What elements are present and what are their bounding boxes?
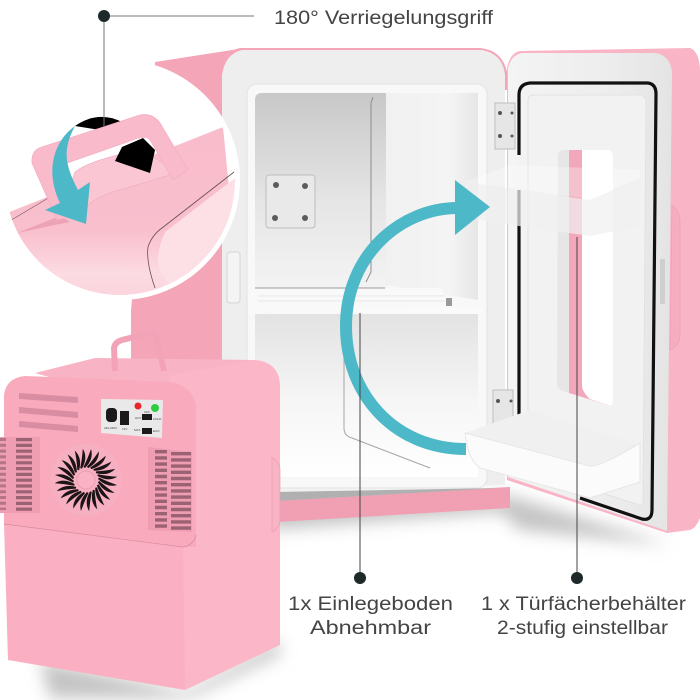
- right side panel: [170, 360, 280, 690]
- upper hinge: [495, 103, 515, 149]
- rear-view fridge: [0, 333, 280, 690]
- frame latch: [227, 252, 240, 303]
- eco max switch: [142, 428, 152, 434]
- body outline: [148, 172, 234, 288]
- panel labels: ECO: [153, 429, 160, 433]
- panel labels: COLD: [153, 417, 162, 421]
- leader dot: [98, 10, 110, 22]
- carrying handle: [114, 333, 164, 371]
- panel labels: [104, 410, 162, 433]
- carrying handle: [32, 115, 188, 220]
- side handle edge: [272, 458, 280, 532]
- white lens ring: [0, 60, 240, 300]
- open door: [465, 48, 700, 533]
- lid front edge: [18, 218, 70, 233]
- upper door shelf, translucent: [465, 165, 640, 236]
- lid outline line: [12, 198, 48, 220]
- label: [288, 594, 453, 639]
- fan hub: [77, 471, 95, 489]
- black handle background: [75, 117, 122, 130]
- front corner highlight: [158, 178, 235, 268]
- left side vent: [0, 437, 40, 513]
- white front frame: [222, 50, 505, 490]
- callout: shelf: [288, 313, 453, 639]
- rear pink body of open fridge: [131, 48, 300, 380]
- leader lines: [104, 16, 254, 127]
- inner door panel: [528, 95, 646, 506]
- leader dot: [571, 572, 583, 584]
- label: 180° Verriegelungsgriff: [274, 8, 494, 29]
- rear corner line: [366, 97, 373, 282]
- panel labels: 12V: [122, 427, 127, 431]
- lower compartment wall: [255, 312, 478, 477]
- right side vent: [148, 447, 192, 532]
- grey rail shadow: [277, 488, 500, 501]
- fan blades: [55, 449, 117, 511]
- top pink rim: [225, 48, 507, 90]
- leader line: [576, 237, 578, 578]
- right side wall upper compartment: [386, 93, 478, 300]
- leader line: [359, 313, 361, 578]
- leader dot: [354, 572, 366, 584]
- panel labels: HOT: [135, 416, 142, 420]
- upper panel outline: [4, 524, 196, 547]
- fan: [50, 444, 122, 516]
- pink base rail: [277, 487, 510, 522]
- lower door shelf: [465, 410, 640, 498]
- top surface: [35, 358, 277, 420]
- top ventilation slots: [19, 393, 78, 432]
- door window: [557, 150, 613, 406]
- label: 1x Einlegeboden: [288, 594, 453, 615]
- teal curved arrow: [45, 126, 90, 224]
- front upper panel: [4, 376, 196, 547]
- callout: door compartment: [481, 237, 687, 639]
- side handle on door: [670, 205, 680, 350]
- lower hinge: [493, 390, 513, 434]
- panel labels: MAX: [134, 428, 141, 432]
- black door gasket: [519, 83, 656, 519]
- panel labels: OFF: [144, 410, 150, 414]
- glass shelf outline in lower compartment: [344, 355, 430, 468]
- open fridge cabinet: [222, 48, 510, 522]
- callout: locking handle: [98, 8, 494, 127]
- door pink shell: [507, 48, 700, 533]
- back wall upper compartment: [255, 93, 388, 295]
- lid recess: [72, 154, 170, 205]
- 12V socket: [120, 411, 129, 425]
- inner lip: [247, 84, 487, 488]
- control panel: [101, 399, 163, 438]
- label: 1 x Türfächerbehälter: [481, 594, 687, 615]
- teal rotation arrow: [346, 180, 490, 449]
- zoom lens: handle detail: [0, 115, 240, 300]
- power socket: [106, 408, 117, 422]
- door inner face: [508, 53, 672, 531]
- green LED: [151, 404, 159, 412]
- panel labels: 220-240V: [104, 426, 117, 430]
- label: [481, 594, 687, 639]
- fan recess: [50, 444, 122, 516]
- black rear arrow: [115, 138, 155, 173]
- side slot on door: [660, 259, 665, 304]
- floor shadow: [40, 496, 670, 698]
- label: Abnehmbar: [310, 618, 432, 639]
- label: 2-stufig einstellbar: [497, 618, 669, 639]
- lid top: [10, 128, 231, 295]
- hot cold switch: [142, 414, 152, 420]
- front lower panel: [4, 524, 185, 690]
- red LED: [134, 402, 142, 410]
- mounting plate: [266, 175, 315, 228]
- removable shelf: [248, 288, 483, 314]
